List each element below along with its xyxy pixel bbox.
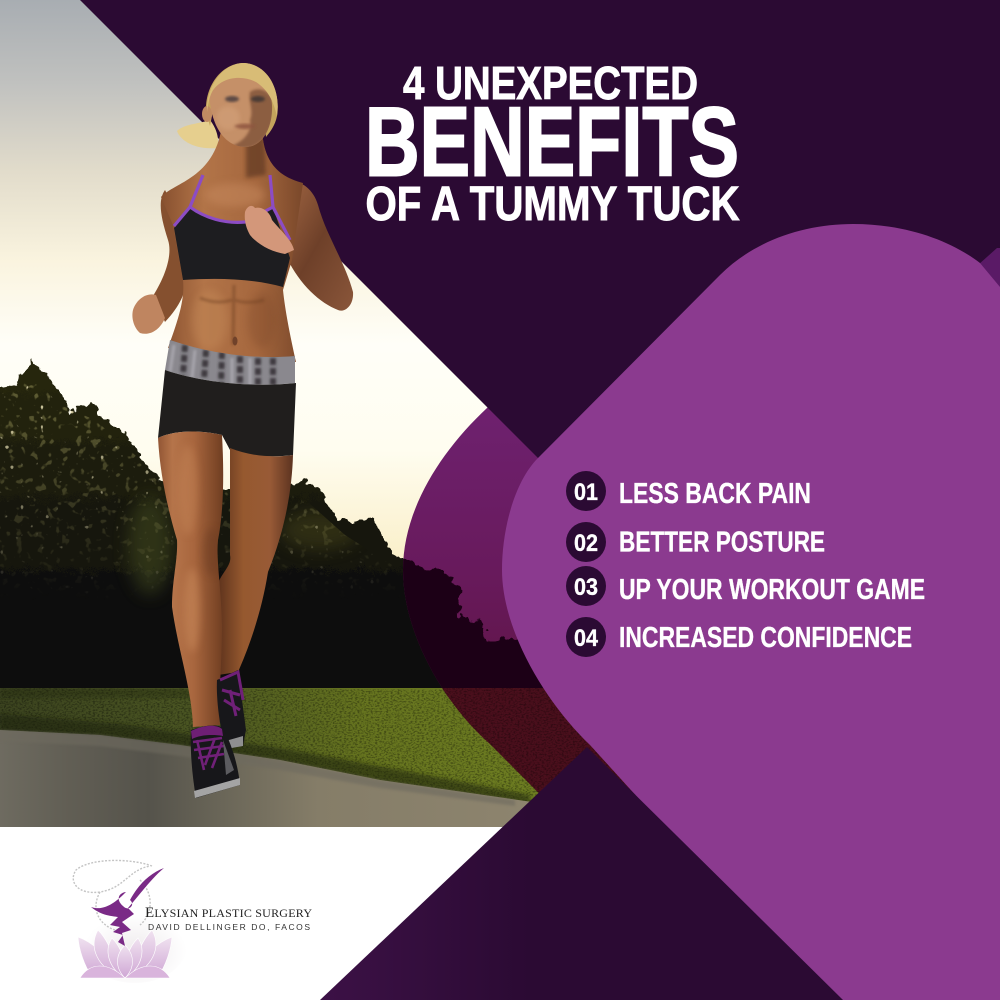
torso with neck (161, 125, 303, 362)
item 04 (566, 617, 912, 657)
tree line (0, 360, 560, 695)
face (210, 78, 272, 147)
front shoe (191, 726, 240, 798)
benefits list (566, 471, 925, 657)
title (365, 57, 740, 231)
olive foliage upper right tree (280, 510, 360, 550)
item 02: BETTER POSTURE (619, 526, 825, 558)
hair top (207, 63, 278, 116)
sports bra (174, 207, 290, 287)
ponytail (177, 120, 218, 148)
item 01: LESS BACK PAIN (619, 478, 811, 510)
title line 1: 4 UNEXPECTED (403, 57, 698, 109)
bottom dark triangle (320, 747, 843, 1000)
title line 2: BENEFITS (365, 86, 739, 196)
sky (0, 0, 600, 690)
logo name: ELYSIAN PLASTIC SURGERY (145, 905, 312, 921)
item 01: 01 (574, 479, 598, 506)
olive foliage beside legs (128, 495, 172, 595)
logo soft shadow (83, 907, 187, 983)
logo swirl lines (73, 860, 152, 930)
logo: Elysian Plastic Surgery (73, 860, 312, 983)
back leg (216, 448, 293, 675)
front leg (158, 432, 224, 727)
arm: viewer's left (153, 190, 186, 322)
shorts (158, 370, 296, 456)
item 02 (566, 522, 825, 562)
leaf highlights (0, 370, 400, 600)
grass (0, 688, 560, 818)
torso shading (194, 138, 272, 346)
navel (232, 336, 238, 346)
fist: chest (245, 206, 294, 254)
logo doctor: DAVID DELLINGER DO, FACOS (148, 922, 310, 932)
runner figure (132, 63, 353, 798)
dancer silhouette (91, 868, 164, 946)
waistband (165, 340, 295, 388)
item 03: 03 (574, 574, 598, 601)
item 04: 04 (574, 625, 599, 652)
small purple corner accent (978, 248, 1000, 290)
lotus flower (78, 930, 172, 978)
ear (202, 106, 212, 122)
title line 3: OF A TUMMY TUCK (366, 177, 740, 231)
item 03: UP YOUR WORKOUT GAME (619, 574, 925, 606)
road (0, 730, 560, 827)
bra purple trim (174, 175, 290, 240)
photo: runner's park background (0, 0, 538, 827)
hair back (206, 63, 278, 137)
fist: left (132, 294, 165, 334)
item 03 (566, 566, 925, 606)
arm: viewer's right (280, 181, 353, 311)
dark plum background panel (80, 0, 1000, 520)
large purple panel (502, 224, 1000, 1000)
back shoe (217, 670, 246, 749)
item 02: 02 (574, 530, 598, 557)
item 01 (566, 471, 811, 511)
item 04: INCREASED CONFIDENCE (619, 622, 912, 654)
translucent purple shape over photo (403, 408, 638, 798)
road shadow bands (0, 730, 515, 806)
